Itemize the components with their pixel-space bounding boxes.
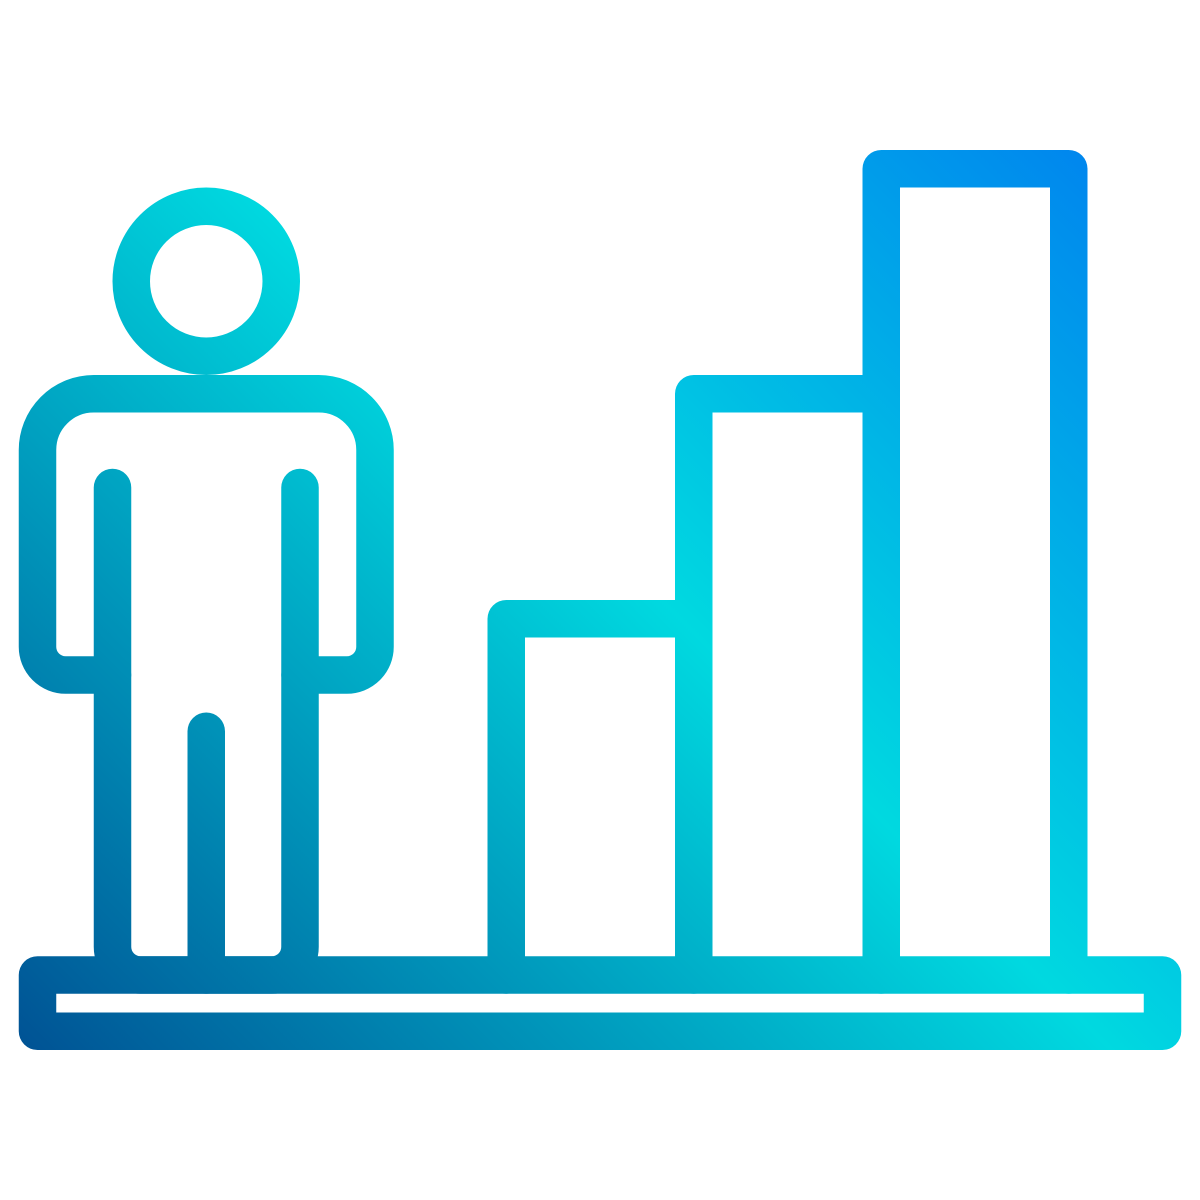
short bar <box>506 619 694 975</box>
tall bar <box>881 169 1069 975</box>
person head <box>131 206 281 356</box>
medium bar <box>694 394 881 975</box>
person inner leg line <box>188 731 225 975</box>
person figure <box>37 206 375 975</box>
person torso and arms <box>37 394 375 675</box>
person legs <box>112 488 300 975</box>
bar chart <box>506 169 1069 975</box>
base platform <box>38 975 1162 1031</box>
